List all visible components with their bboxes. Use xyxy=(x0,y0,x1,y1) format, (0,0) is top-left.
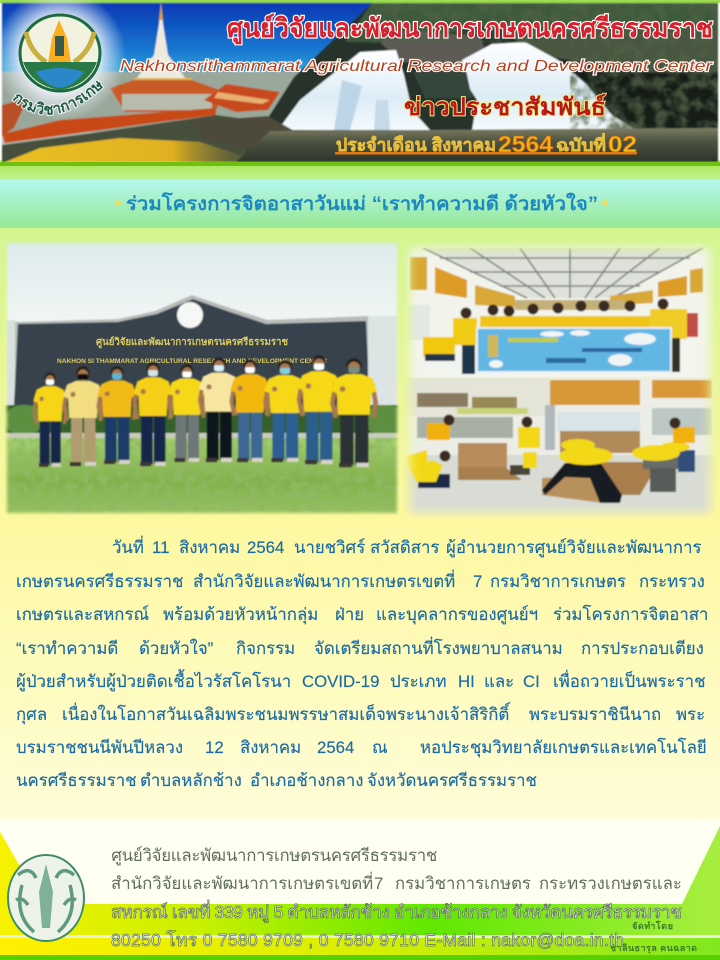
footer seal xyxy=(8,855,84,941)
body paragraph: สิงหาคม xyxy=(240,738,301,757)
photo: volunteers with banner in hall xyxy=(404,242,716,518)
body paragraph: กรมวิชาการเกษตร xyxy=(490,572,626,591)
footer address: สหกรณ์ เลขที่ 339 หมู่ 5 ตำบลหลักช้าง อำเภอช้างกลาง จังหวัดนครศรีธรรมราช xyxy=(111,900,682,923)
banner issue line: ประจำเดือน สิงหาคม xyxy=(336,135,496,155)
banner news label: ข่าวประชาสัมพันธ์ xyxy=(404,93,606,121)
banner issue line: 2564 xyxy=(498,131,553,157)
body paragraph: 2564 xyxy=(247,538,284,557)
body paragraph: เกษตรนครศรีธรรมราช xyxy=(16,572,183,591)
body paragraph: จังหวัดนครศรีธรรมราช xyxy=(367,771,537,790)
body paragraph: หอประชุมวิทยาลัยเกษตรและเทคโนโลยี xyxy=(420,737,707,758)
banner issue line: ฉบับที่ xyxy=(556,133,606,155)
body paragraph: “เราทำความดี xyxy=(16,639,118,658)
body paragraph: นายชวิศร์ xyxy=(294,538,365,557)
body paragraph: เกษตรและสหกรณ์ xyxy=(16,605,149,624)
banner issue line: 02 xyxy=(608,131,637,157)
footer panel xyxy=(0,820,720,960)
body paragraph: กระทรวง xyxy=(639,572,705,591)
photo: group at center sign: NAKHON SI THAMMARAT AGRICULTURAL RESEARCH AND DEVELOPMENT CENTER xyxy=(57,358,327,365)
body paragraph: สำนักวิจัยและพัฒนาการเกษตรเขตที่ xyxy=(193,569,455,591)
green divider stripe xyxy=(0,162,720,166)
body paragraph: นครศรีธรรมราช xyxy=(16,771,137,790)
body paragraph: ณ xyxy=(372,738,388,757)
body paragraph: สิงหาคม xyxy=(179,538,240,557)
body paragraph: เนื่องในโอกาสวันเฉลิมพระชนมพรรษาสมเด็จพระนางเจ้าสิริกิติ์ xyxy=(62,702,511,724)
photo: group at center sign xyxy=(4,240,407,516)
headline band: ร่วมโครงการจิตอาสาวันแม่ “เราทำความดี ด้วยหัวใจ” xyxy=(126,192,598,215)
body paragraph: ผู้อำนวยการศูนย์วิจัยและพัฒนาการ xyxy=(446,538,702,558)
footer address: สำนักวิจัยและพัฒนาการเกษตรเขตที่ xyxy=(111,871,373,893)
body paragraph: อำเภอช้างกลาง xyxy=(250,771,363,790)
credit: ชาลินธารุล คนฉลาด xyxy=(610,943,697,954)
banner issue line xyxy=(335,131,637,157)
header banner xyxy=(0,0,720,162)
body paragraph: ประเภท xyxy=(390,672,447,691)
body paragraph: การประกอบเตียง xyxy=(581,639,704,658)
body paragraph: จัดเตรียมสถานที่โรงพยาบาลสนาม xyxy=(314,636,563,658)
footer address xyxy=(111,846,682,950)
body paragraph: พระ xyxy=(676,705,705,724)
body paragraph: COVID-19 xyxy=(302,672,379,691)
footer address: กระทรวงเกษตรและ xyxy=(539,874,682,893)
people xyxy=(33,356,377,467)
sign lettering: ศูนย์วิจัยและพัฒนาการเกษตรนครศรีธรรมราช xyxy=(96,336,288,349)
banner english subtitle: Nakhonsrithammarat Agricultural Research and Development Center xyxy=(120,58,713,75)
body paragraph: HI xyxy=(458,672,475,691)
footer address: กรมวิชาการเกษตร xyxy=(395,874,531,893)
body paragraph: และ xyxy=(484,672,514,691)
footer address: ศูนย์วิจัยและพัฒนาการเกษตรนครศรีธรรมราช xyxy=(111,846,437,866)
body paragraph: ผู้ป่วยสำหรับผู้ป่วยติดเชื้อไวรัสโคโรนา xyxy=(16,669,291,692)
body paragraph: 7 xyxy=(473,572,482,591)
photo: volunteers assembling cardboard beds xyxy=(404,378,716,518)
credit: จัดทำโดย xyxy=(632,920,673,931)
credit xyxy=(610,920,697,954)
body paragraph: ฝ่าย xyxy=(335,605,364,624)
body paragraph: 12 xyxy=(205,738,224,757)
body paragraph: 2564 xyxy=(317,738,354,757)
body paragraph: กุศล xyxy=(16,705,47,725)
headline band xyxy=(0,180,720,228)
body paragraph: CI xyxy=(523,672,540,691)
body paragraph: และบุคลากรของศูนย์ฯ xyxy=(376,605,538,625)
body paragraph: กิจกรรม xyxy=(236,639,295,658)
banner title: ศูนย์วิจัยและพัฒนาการเกษตนครศรีธรรมราช xyxy=(227,13,713,45)
footer address: 7 xyxy=(374,874,383,893)
body paragraph: พร้อมด้วยหัวหน้ากลุ่ม xyxy=(163,605,318,625)
body paragraph: ตำบลหลักช้าง xyxy=(140,771,242,790)
body paragraph: พระบรมราชินีนาถ xyxy=(529,705,661,724)
body paragraph: วันที่ xyxy=(112,535,144,557)
body paragraph: ร่วมโครงการจิตอาสา xyxy=(553,604,708,624)
footer address: 80250 โทร 0 7580 9709 , 0 7580 9710 E-Mail : nakor@doa.in.th xyxy=(111,930,624,950)
body paragraph: 11 xyxy=(152,538,169,557)
body paragraph: เพื่อถวายเป็นพระราช xyxy=(553,669,706,691)
banner scene: temple and waterfall xyxy=(2,3,718,162)
body paragraph xyxy=(16,535,708,790)
body paragraph: บรมราชชนนีพันปีหลวง xyxy=(16,738,183,757)
body paragraph: สวัสดิสาร xyxy=(370,538,440,557)
body paragraph: ด้วยหัวใจ” xyxy=(139,638,213,658)
